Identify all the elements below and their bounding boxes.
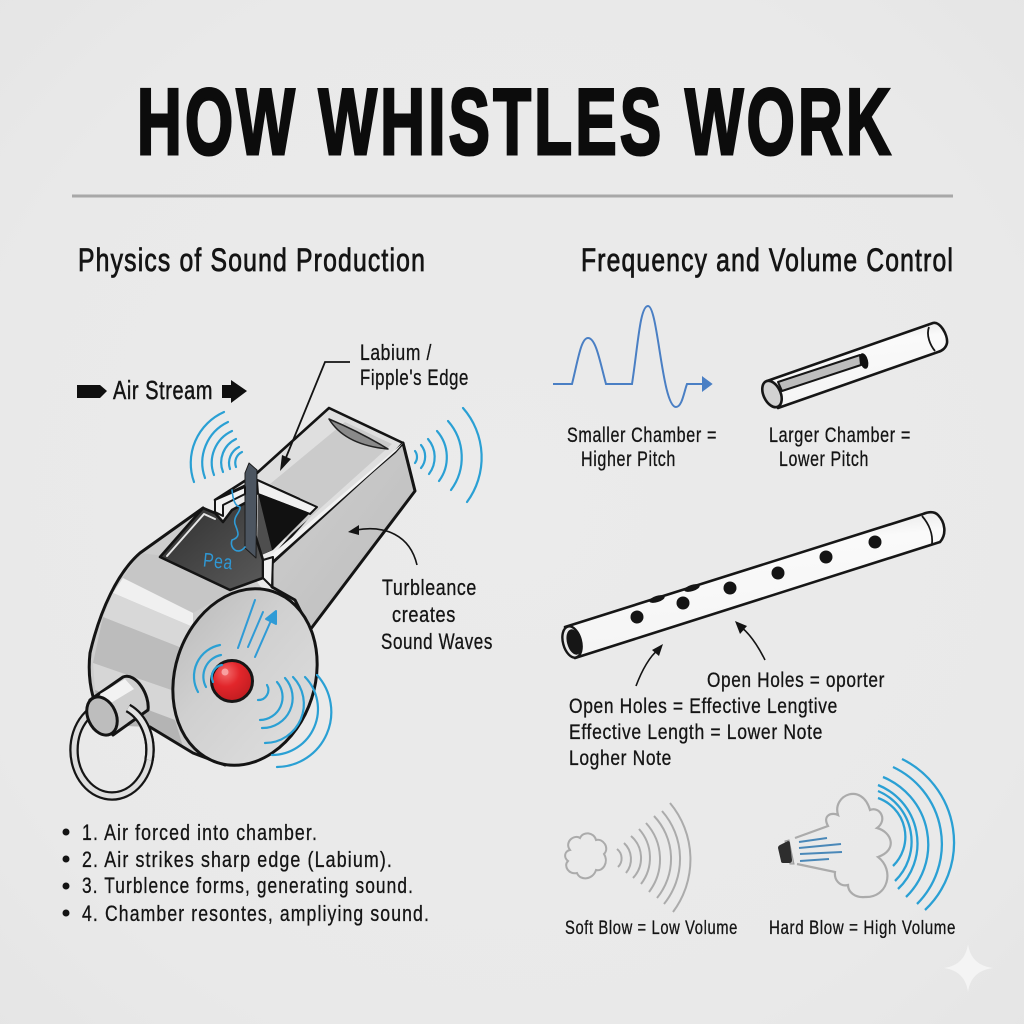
key ring [74, 704, 150, 796]
icon: soft blow cloud and waves [565, 803, 690, 912]
label: smaller chamber: Higher Pitch [581, 448, 676, 471]
whistle top face [215, 408, 403, 560]
white lip of window [257, 480, 317, 514]
flute notes [569, 668, 885, 770]
flute notes: Open Holes = Effective Lengtive [569, 694, 838, 718]
whistle illustration [74, 408, 482, 796]
whistle barrel [89, 508, 263, 770]
label: smaller chamber [567, 424, 717, 471]
waveform chart: higher pitch [553, 306, 711, 407]
label: soft blow: Soft Blow = Low Volume [565, 918, 738, 939]
sound waves: left of ball [194, 645, 222, 692]
icon: large chamber tube [758, 323, 947, 410]
sound waves: right [415, 408, 482, 502]
callout: labium: Fipple's Edge [360, 365, 469, 390]
flute notes: Effective Length = Lower Note [569, 720, 823, 744]
sound waves: right of ball [258, 675, 331, 767]
label: larger chamber [769, 424, 911, 471]
flute notes: Open Holes = oporter [707, 668, 885, 692]
labium blade [245, 463, 257, 558]
callout: turbulence: Sound Waves [381, 629, 493, 654]
steps list: 2. Air strikes sharp edge (Labium). [82, 847, 393, 872]
callout: turbulence: creates [392, 602, 456, 627]
steps list: 1. Air forced into chamber. [82, 820, 318, 845]
red ball [212, 660, 252, 702]
label: smaller chamber: Smaller Chamber = [567, 424, 717, 447]
air flow arrows [238, 600, 276, 657]
steps list: 3. Turblence forms, generating sound. [82, 873, 414, 898]
callout: labium: Labium / [360, 340, 432, 365]
callout: turbulence [348, 525, 493, 654]
steps list [62, 820, 430, 926]
steps list: 4. Chamber resontes, ampliying sound. [82, 901, 430, 926]
icon: sparkle watermark [944, 944, 993, 992]
flute notes: Logher Note [569, 746, 672, 770]
callout: labium [280, 340, 469, 471]
label: larger chamber: Lower Pitch [779, 448, 869, 471]
turbulence squiggle [231, 490, 245, 551]
lip edges [215, 487, 273, 587]
window opening [257, 493, 310, 557]
callout: turbulence: Turbleance [382, 575, 477, 600]
icon: hard blow nozzle, cloud and waves [778, 759, 954, 910]
sound waves: top [191, 412, 242, 482]
pea label: Pea [202, 549, 234, 575]
chamber opening with pea [160, 503, 263, 590]
arrows to flute [636, 621, 765, 686]
icon: flute with holes [559, 512, 944, 660]
label: larger chamber: Larger Chamber = [769, 424, 911, 447]
heading: physics of sound production: Physics of Sound Production [78, 242, 426, 278]
whistle mouthpiece side wall [272, 443, 415, 630]
label: hard blow: Hard Blow = High Volume [769, 918, 956, 939]
whistle side disc [151, 570, 339, 784]
air stream label: Air Stream [113, 375, 213, 405]
mouthpiece cylinder [81, 676, 150, 760]
